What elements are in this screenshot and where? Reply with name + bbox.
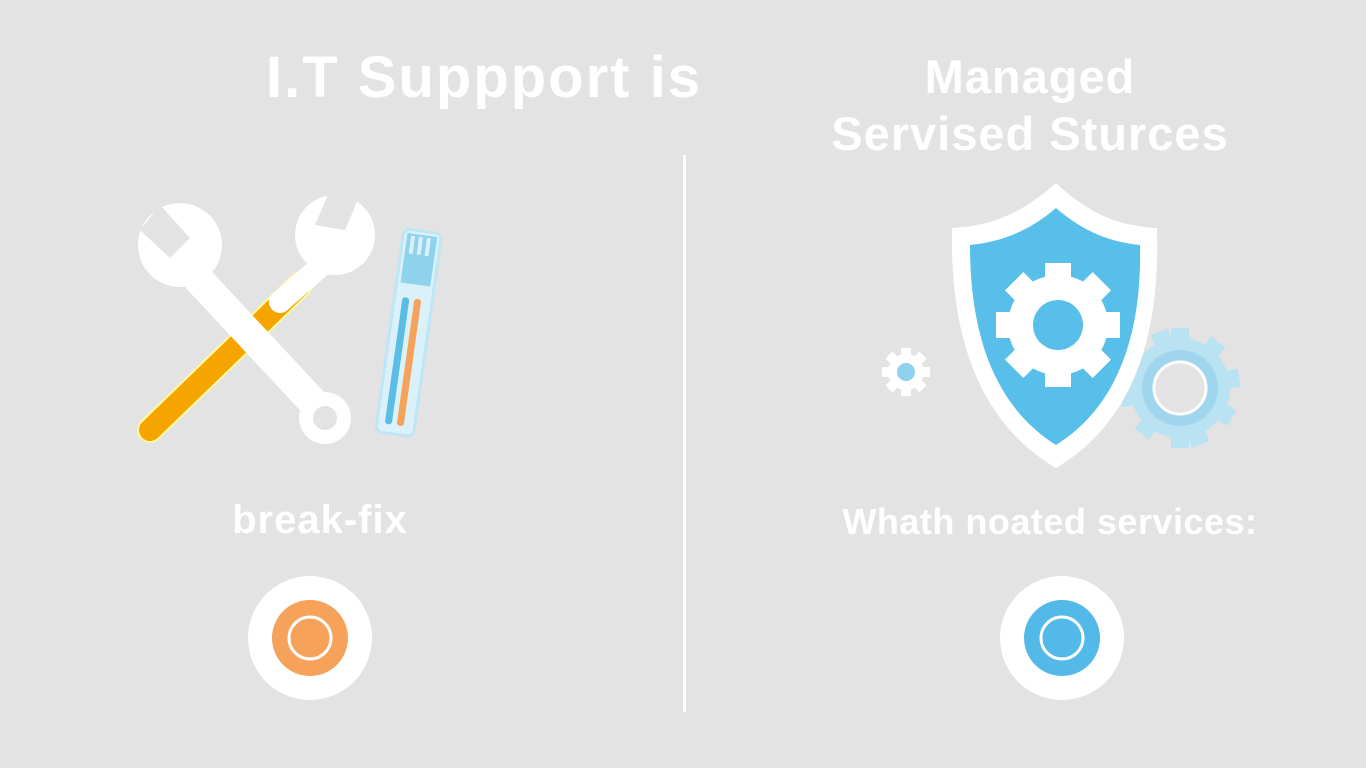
- title: left: I.T Suppport is: [266, 45, 702, 110]
- label: managed services: Whath noated services:: [842, 501, 1258, 542]
- title: right: Managed: [925, 50, 1135, 103]
- title: right: Servised Sturces: [831, 107, 1229, 160]
- title: right: [831, 50, 1229, 160]
- icon: blue circle button: [1000, 576, 1124, 700]
- icon: orange circle button: [248, 576, 372, 700]
- label: break-fix: break-fix: [232, 498, 408, 542]
- divider: [683, 155, 686, 712]
